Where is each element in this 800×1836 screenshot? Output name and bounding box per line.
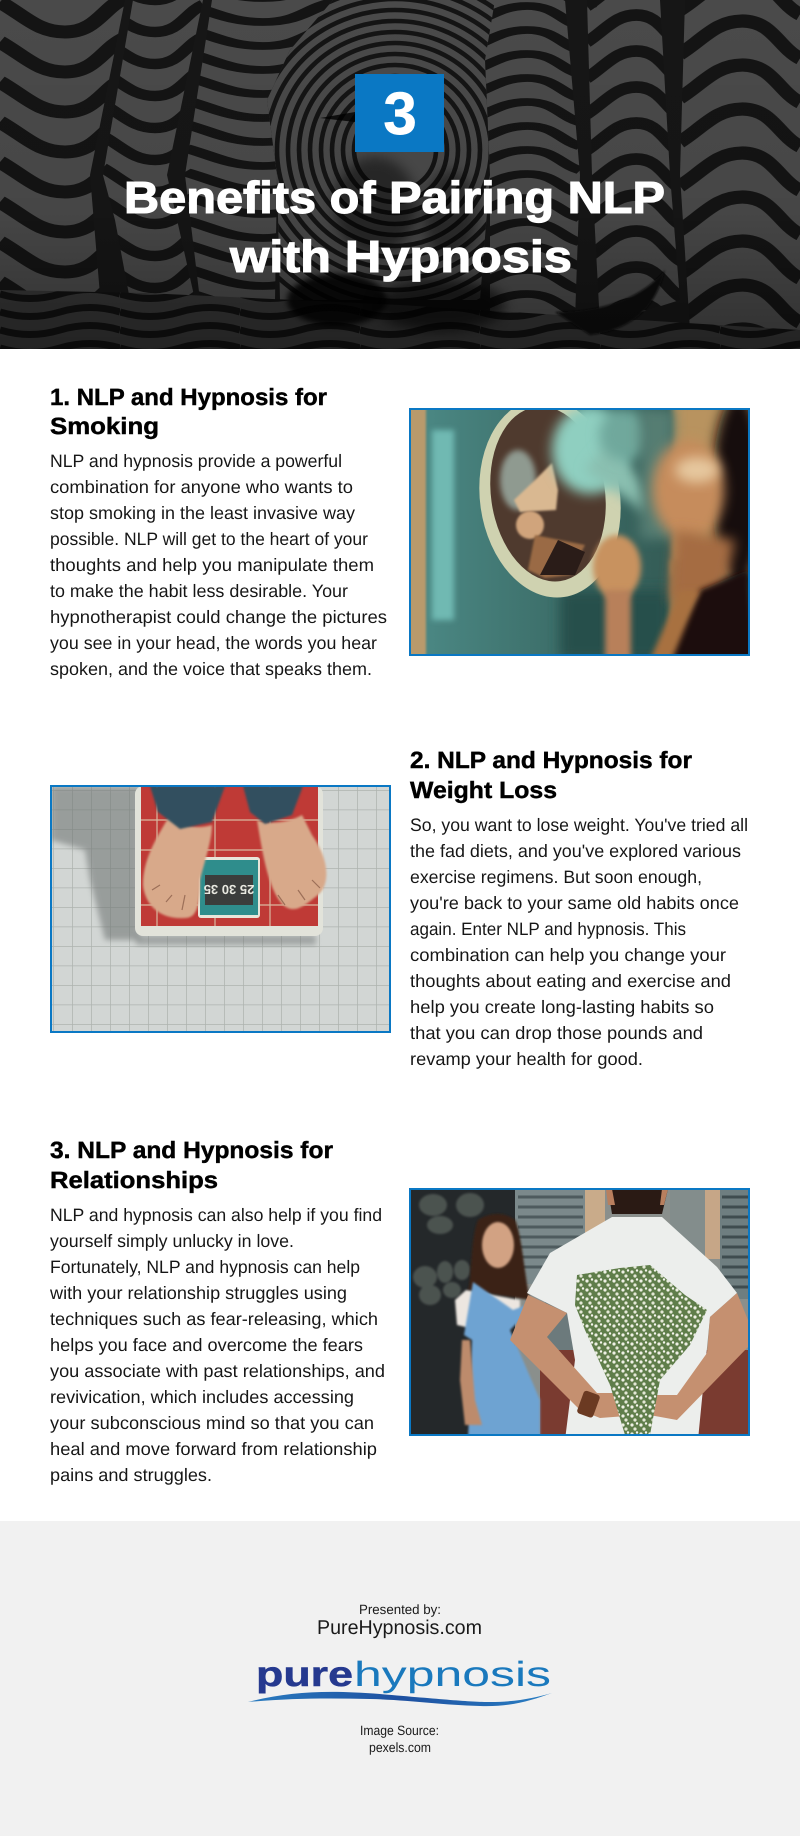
text block: section 2 body (410, 815, 748, 1069)
number badge: 3 (383, 80, 417, 147)
text block: section 3 body: NLP and hypnosis can also help if you find (50, 1205, 382, 1225)
text block: section 1 body: to make the habit less desirable. Your (50, 581, 348, 601)
heading: section 2 (410, 747, 692, 803)
text block: section 1 body: spoken, and the voice that speaks them. (50, 659, 372, 679)
text block: section 3 body: yourself simply unlucky in love. (50, 1231, 294, 1251)
text block: section 1 body: hypnotherapist could change the pictures (50, 607, 387, 627)
image source credit: Image Source: (360, 1723, 439, 1738)
heading: section 1: Smoking (50, 413, 159, 439)
text block: section 3 body (49, 1205, 385, 1485)
header panel: hypnotic stripes background (0, 0, 800, 349)
text block: section 2 body: combination can help you change your (410, 945, 726, 965)
text block: section 2 body: revamp your health for good. (410, 1049, 643, 1069)
image source credit: pexels.com (369, 1740, 431, 1755)
text block: section 1 body: combination for anyone who wants to (50, 477, 353, 497)
text block: section 3 body: your subconscious mind so that you can (50, 1413, 374, 1433)
heading: section 1 (50, 384, 327, 439)
photo: woman smoking at a mirror (409, 408, 750, 656)
text block: section 1 body: thoughts and help you manipulate them (50, 555, 374, 575)
text block: section 3 body: you associate with past relationships, and (50, 1361, 385, 1381)
heading: section 2: Weight Loss (410, 777, 557, 803)
footer panel (0, 1521, 800, 1836)
heading: section 1: 1. NLP and Hypnosis for (50, 384, 327, 410)
text block: section 2 body: exercise regimens. But soon enough, (410, 867, 702, 887)
photo: feet on a bathroom scale: 25 30 35 (204, 882, 254, 897)
image source credit (360, 1723, 439, 1755)
photo: man hiding a bouquet from a woman (410, 1189, 750, 1440)
text block: section 2 body: that you can drop those pounds and (410, 1023, 703, 1043)
title: with Hypnosis (229, 231, 572, 282)
text block: section 3 body: pains and struggles. (50, 1465, 212, 1485)
text block: section 2 body: the fad diets, and you've explored various (410, 841, 741, 861)
text block: section 1 body: stop smoking in the least invasive way (50, 503, 355, 523)
text block: section 1 body (50, 451, 387, 679)
text block: section 2 body: help you create long-lasting habits so (410, 997, 714, 1017)
text block: section 3 body: revivication, which includes accessing (50, 1387, 354, 1407)
text block: section 2 body: thoughts about eating and exercise and (410, 971, 731, 991)
title (124, 172, 665, 282)
text block: section 3 body: helps you face and overcome the fears (50, 1335, 363, 1355)
heading: section 2: 2. NLP and Hypnosis for (410, 747, 692, 773)
text block: section 2 body: you're back to your same old habits once (410, 893, 739, 913)
text block: section 3 body: heal and move forward from relationship (50, 1439, 377, 1459)
title: Benefits of Pairing NLP (124, 172, 665, 223)
text block: section 3 body: techniques such as fear-releasing, which (50, 1309, 378, 1329)
presented by label: Presented by: (359, 1602, 441, 1617)
logo: purehypnosis: pure (256, 1655, 353, 1694)
section 1: smoking (50, 384, 764, 679)
heading: section 3 (50, 1137, 333, 1193)
section 2: weight loss (51, 747, 748, 1069)
text block: section 2 body: So, you want to lose weight. You've tried all (410, 815, 748, 835)
logo: purehypnosis (248, 1655, 552, 1706)
heading: section 3: Relationships (50, 1167, 218, 1193)
number badge (355, 74, 444, 152)
logo: purehypnosis: hypnosis (354, 1655, 551, 1694)
heading: section 3: 3. NLP and Hypnosis for (50, 1137, 333, 1163)
text block: section 3 body: Fortunately, NLP and hypnosis can help (50, 1257, 360, 1277)
text block: section 2 body: again. Enter NLP and hypnosis. This (410, 919, 686, 939)
text block: section 1 body: you see in your head, the words you hear (50, 633, 377, 653)
text block: section 1 body: possible. NLP will get to the heart of your (50, 529, 368, 549)
brand website: PureHypnosis.com (317, 1617, 482, 1639)
text block: section 1 body: NLP and hypnosis provide a powerful (50, 451, 342, 471)
section 3: relationships (49, 1137, 750, 1485)
text block: section 3 body: with your relationship struggles using (49, 1283, 347, 1303)
photo: feet on a bathroom scale (51, 786, 390, 1032)
